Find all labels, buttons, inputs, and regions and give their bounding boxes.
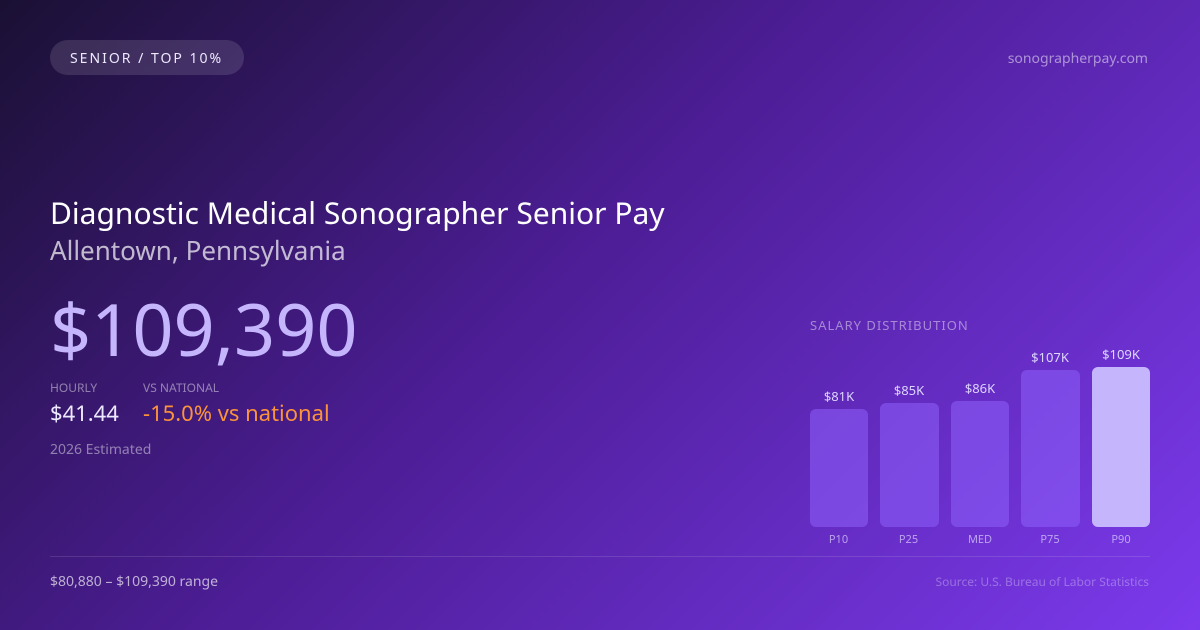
bar: P10: $81K <box>824 387 854 405</box>
stat: vs national <box>143 379 330 428</box>
bar: P25 <box>880 403 939 527</box>
source text: Source: U.S. Bureau of Labor Statistics <box>936 573 1149 590</box>
bar: median <box>951 401 1009 527</box>
bar: P10 <box>810 387 868 527</box>
value: $109K: $109K <box>1102 345 1140 363</box>
label: P75: P75 <box>1040 532 1060 547</box>
bar: P75 <box>1021 370 1080 527</box>
site name: sonographerpay.com <box>1008 49 1148 68</box>
label: P10: P10 <box>829 532 848 547</box>
stat: hourly: $41.44 <box>50 398 119 428</box>
range text: $80,880 – $109,390 range <box>50 572 218 591</box>
value: $85K: $85K <box>894 381 924 399</box>
salary figure: $109,390 <box>50 280 358 378</box>
label: P25: P25 <box>899 532 918 547</box>
stat: vs national: -15.0% vs national <box>143 398 330 428</box>
year note: 2026 Estimated <box>50 440 151 459</box>
badge: senior / top 10% <box>50 40 244 75</box>
chart heading: SALARY DISTRIBUTION <box>810 316 969 334</box>
value: $86K: $86K <box>965 379 995 397</box>
bar: P90 <box>1092 367 1150 527</box>
label: P90: P90 <box>1111 532 1131 547</box>
title: Diagnostic Medical Sonographer Senior Pay <box>50 192 665 233</box>
stat: vs national: VS NATIONAL <box>143 379 219 396</box>
stat: hourly: HOURLY <box>50 379 97 396</box>
badge: senior / top 10%: SENIOR / TOP 10% <box>70 49 223 68</box>
stat: hourly <box>50 379 119 428</box>
subtitle: location: Allentown, Pennsylvania <box>50 232 346 268</box>
label: MED: MED <box>968 532 992 547</box>
value: $107K: $107K <box>1031 348 1069 366</box>
